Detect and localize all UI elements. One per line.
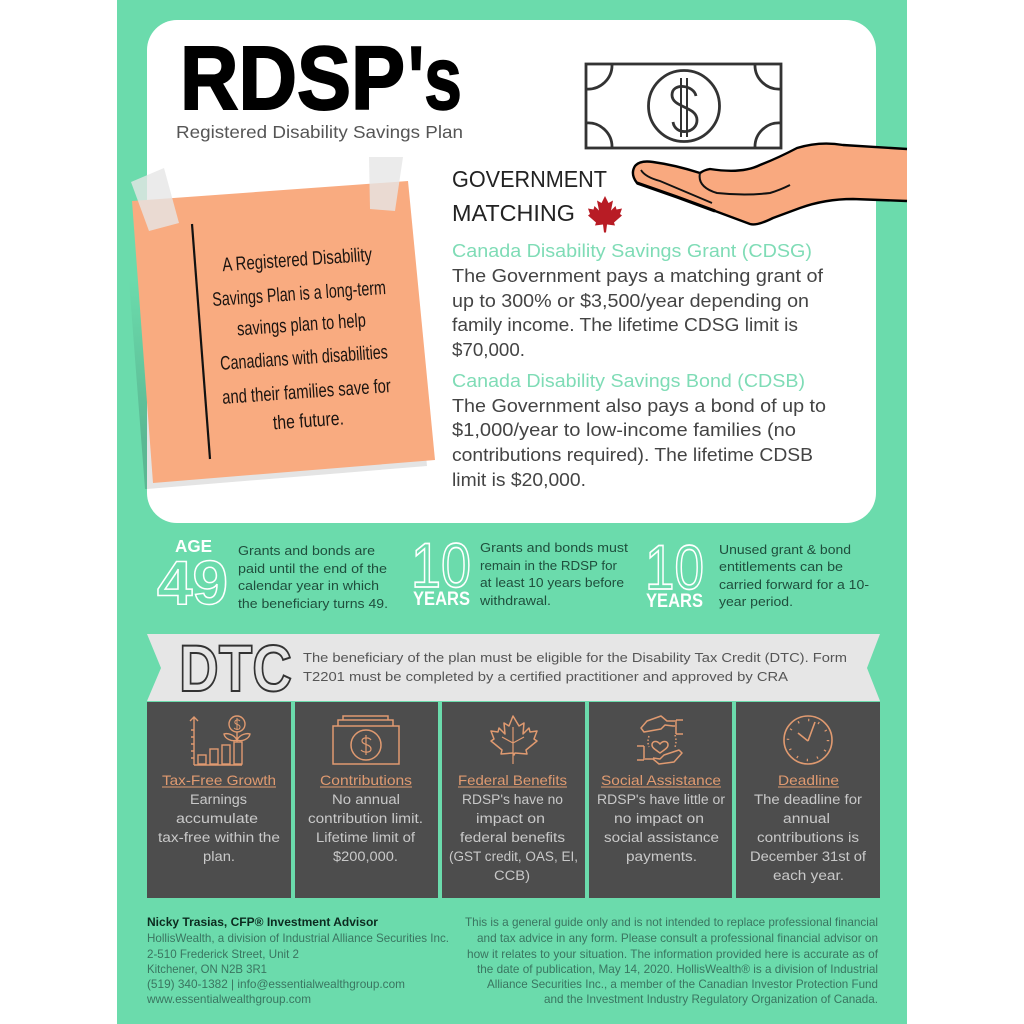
footer: disclaimer: the date of publication, May 14, 2020. HollisWealth® is a division of Industrial — [477, 962, 878, 976]
stat: 10 years carry forward: 10 — [645, 533, 704, 603]
panel: Social Assistance: payments. — [626, 849, 697, 864]
panel: Social Assistance: social assistance — [604, 830, 719, 845]
note handwritten text: the future. — [272, 408, 345, 434]
text block: CDSG: $70,000. — [452, 339, 525, 360]
note rule — [192, 224, 210, 459]
icon: maple leaf outline — [491, 716, 537, 764]
footer: disclaimer: and the Investment Industry Regulatory Organization of Canada. — [544, 992, 878, 1006]
text block: CDSG: up to 300% or $3,500/year depending on — [452, 290, 809, 311]
panel: sticky note — [129, 157, 435, 489]
panel: Social Assistance — [589, 702, 732, 898]
text block: CDSG: Canada Disability Savings Grant (CDSG) — [452, 240, 812, 261]
stat: age 49: AGE — [175, 536, 212, 556]
icon: clock — [784, 716, 832, 764]
note handwritten text: Canadians with disabilities — [219, 341, 389, 375]
panel: Deadline: each year. — [773, 868, 844, 883]
footer: disclaimer: This is a general guide only and is not intended to replace professional financial — [465, 915, 878, 929]
title: 's — [408, 29, 462, 129]
text block: CDSG — [452, 240, 824, 360]
panel: Tax-Free Growth: tax-free within the — [158, 830, 280, 845]
footer: disclaimer: Alliance Securities Inc., a member of the Canadian Investor Protection Fund — [487, 977, 878, 991]
note handwritten text: and their families save for — [221, 375, 392, 409]
banner: DTC: The beneficiary of the plan must be eligible for the Disability Tax Credit (DTC). Form — [303, 650, 847, 665]
note paper — [132, 181, 435, 483]
panel: Tax-Free Growth — [147, 702, 291, 898]
panel: Tax-Free Growth: accumulate — [176, 811, 258, 826]
panel: Deadline: Deadline — [778, 772, 839, 788]
stat: 10 years remain: remain in the RDSP for — [480, 559, 617, 573]
text block: CDSB: Canada Disability Savings Bond (CDSB) — [452, 370, 805, 391]
stat: age 49: paid until the end of the — [238, 562, 387, 576]
panel: Contributions: Lifetime limit of — [316, 830, 415, 845]
panel: Tax-Free Growth: Tax-Free Growth — [162, 772, 276, 788]
panel: Federal Benefits — [442, 702, 585, 898]
footer: advisor contact — [146, 915, 449, 1006]
tape strips — [131, 157, 403, 231]
note handwritten text: Savings Plan is a long-term — [212, 277, 387, 311]
panel: Federal Benefits: federal benefits — [460, 830, 565, 845]
heading: government matching: GOVERNMENT — [452, 166, 607, 192]
note handwritten text — [212, 244, 392, 434]
heading: government matching — [452, 166, 607, 226]
icon: hands and heart — [637, 716, 683, 764]
icon: cash stack — [333, 716, 399, 764]
panel: Social Assistance: RDSP's have little or — [597, 792, 726, 807]
note shadow — [129, 187, 427, 489]
text block: CDSB: The Government also pays a bond of up to — [452, 395, 826, 416]
text block: CDSG: family income. The lifetime CDSG limit is — [452, 314, 798, 335]
footer: disclaimer: and tax advice in any form. Please consult a professional financial advisor on — [477, 931, 878, 945]
footer: advisor contact: Kitchener, ON N2B 3R1 — [147, 962, 267, 976]
panel: Contributions: No annual — [332, 792, 400, 807]
panel: Social Assistance: no impact on — [614, 811, 704, 826]
text block: CDSB: contributions required). The lifetime CDSB — [452, 444, 813, 465]
panel: Social Assistance: Social Assistance — [601, 772, 721, 788]
stat: age 49: Grants and bonds are — [238, 544, 375, 558]
stat: 10 years carry forward: year period. — [719, 595, 793, 609]
panel: Federal Benefits: CCB) — [494, 868, 530, 883]
footer: disclaimer — [465, 915, 879, 1006]
icon: open hand — [633, 144, 907, 224]
stat: 10 years remain — [411, 531, 629, 610]
title: RDSP — [180, 29, 405, 129]
panel: Federal Benefits: Federal Benefits — [458, 772, 567, 788]
panel: Deadline: The deadline for — [754, 792, 863, 807]
banner: DTC — [147, 631, 880, 705]
panel: Deadline — [736, 702, 880, 898]
stat: 10 years carry forward: Unused grant & bond — [719, 543, 851, 557]
footer: advisor contact: HollisWealth, a division of Industrial Alliance Securities Inc. — [147, 931, 449, 945]
stat: 10 years remain: at least 10 years before — [480, 576, 624, 590]
banner: DTC: DTC — [179, 631, 292, 705]
panel: Deadline: December 31st of — [750, 849, 866, 864]
heading: government matching: MATCHING — [452, 200, 575, 226]
panel: Deadline: contributions is — [757, 830, 859, 845]
panel: Contributions: contribution limit. — [308, 811, 423, 826]
stat: 10 years carry forward: carried forward for a 10- — [719, 578, 869, 592]
panel: Federal Benefits: impact on — [476, 811, 545, 826]
icon: maple leaf — [588, 196, 622, 232]
panel: Contributions: $200,000. — [333, 849, 398, 864]
footer: advisor contact: Nicky Trasias, CFP® Investment Advisor — [147, 915, 378, 929]
title: Registered Disability Savings Plan — [176, 122, 463, 142]
stat: 10 years carry forward: entitlements can be — [719, 560, 843, 574]
icon: dollar bill — [586, 64, 781, 148]
panel: Federal Benefits: RDSP's have no — [462, 792, 563, 807]
stat: age 49: calendar year in which — [238, 579, 379, 593]
banner: DTC: T2201 must be completed by a certified practitioner and approved by CRA — [303, 669, 788, 684]
panel: Deadline: annual — [783, 811, 830, 826]
panel: Contributions — [295, 702, 438, 898]
stat: 10 years remain: YEARS — [413, 589, 470, 610]
stat: age 49 — [157, 536, 388, 618]
text block: CDSB: $1,000/year to low-income families (no — [452, 419, 796, 440]
panel: white header card — [147, 20, 876, 523]
stat: 10 years carry forward — [645, 533, 869, 612]
note handwritten text: savings plan to help — [236, 309, 367, 340]
stat: 10 years remain: 10 — [411, 531, 471, 601]
panel: Federal Benefits: (GST credit, OAS, EI, — [449, 849, 578, 864]
text block: CDSG: The Government pays a matching grant of — [452, 265, 824, 286]
text block: CDSB: limit is $20,000. — [452, 469, 586, 490]
stat: age 49: 49 — [157, 549, 228, 618]
panel: Tax-Free Growth: Earnings — [190, 792, 247, 807]
footer: advisor contact: (519) 340-1382 | info@essentialwealthgroup.com — [147, 977, 405, 991]
footer: disclaimer: how it relates to your situation. The information provided here is accurate as of — [467, 947, 879, 961]
stat: age 49: the beneficiary turns 49. — [238, 597, 388, 611]
stat: 10 years remain: Grants and bonds must — [480, 541, 629, 555]
text block: CDSB — [452, 370, 826, 490]
icon: growth chart — [190, 716, 250, 765]
stat: 10 years remain: withdrawal. — [479, 594, 551, 608]
panel: Tax-Free Growth: plan. — [203, 849, 235, 864]
green page background — [117, 0, 907, 1024]
footer: advisor contact: 2-510 Frederick Street, Unit 2 — [147, 947, 299, 961]
note handwritten text: A Registered Disability — [222, 244, 373, 276]
stat: 10 years carry forward: YEARS — [646, 591, 703, 612]
footer: advisor contact: www.essentialwealthgroup.com — [146, 992, 311, 1006]
panel: Contributions: Contributions — [320, 772, 412, 788]
